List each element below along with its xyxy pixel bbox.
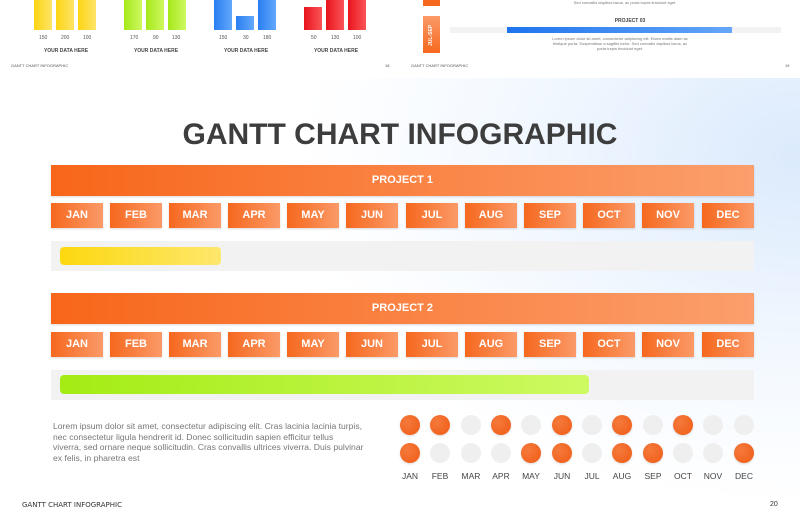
months row 1: OCT: [597, 209, 621, 221]
months row 2: [50, 332, 755, 359]
thumbnail: previous slide project 03: PROJECT 03: [615, 18, 645, 24]
dot chart month labels: JUN: [554, 471, 570, 481]
thumbnail: previous slide bar charts: 170: [130, 35, 138, 41]
text block: nec consectetur ligula hendrerit id. Donec sollicitudin sapien efficitur tellus: [53, 432, 333, 442]
dot chart month labels: SEP: [644, 471, 662, 481]
months row 2: APR: [242, 338, 266, 350]
months row 2: NOV: [656, 338, 680, 350]
months row 2: AUG: [479, 338, 503, 350]
thumbnail: previous slide bar charts: 130: [331, 35, 339, 41]
months row 1: FEB: [125, 209, 147, 221]
panel: project 1: [50, 165, 755, 271]
thumbnail: previous slide bar charts: 150: [219, 35, 227, 41]
title: GANTT CHART INFOGRAPHIC: [182, 118, 617, 151]
panel: project 2: [50, 293, 755, 400]
thumbnail: previous slide bar charts: 130: [172, 35, 180, 41]
months row 1: NOV: [656, 209, 680, 221]
months row 1: APR: [242, 209, 266, 221]
dot matrix chart: [400, 415, 754, 465]
red bars: [304, 7, 322, 30]
green progress bar: [60, 375, 589, 394]
months row 1: [50, 203, 755, 230]
dot chart month labels: AUG: [613, 471, 631, 481]
thumbnail: previous slide bar charts: YOUR DATA HERE: [314, 48, 358, 54]
dot chart month labels: JUL: [584, 471, 600, 481]
months row 2: OCT: [597, 338, 621, 350]
thumbnail: previous slide bar charts: 200: [61, 35, 69, 41]
green bars: [124, 0, 142, 30]
months row 2: SEP: [539, 338, 561, 350]
thumbnail: previous slide bar charts: 100: [353, 35, 361, 41]
thumbnail: previous slide project 03: 19: [785, 63, 789, 68]
project 1 header: [51, 165, 754, 196]
months row 2: JUL: [422, 338, 442, 350]
dot chart month labels: JAN: [402, 471, 418, 481]
thumbnail footer: GANTT CHART INFOGRAPHIC: [11, 63, 68, 68]
timeline track 1: [51, 241, 754, 271]
thumbnail: previous slide bar charts: 180: [263, 35, 271, 41]
thumbnail: previous slide project 03: GANTT CHART INFOGRAPHIC: [411, 63, 468, 68]
months row 2: JAN: [66, 338, 88, 350]
yellow progress bar: [60, 247, 221, 265]
months row 1: JAN: [66, 209, 88, 221]
thumbnail: previous slide bar charts: YOUR DATA HERE: [134, 48, 178, 54]
months row 2: MAR: [182, 338, 208, 350]
thumbnail: previous slide project 03: Lorem ipsum dolor sit amet, consectetur adipiscing elit. Etiam mattis diam ac tristique porta. Suspendisse a sagittis tortor. Sed convallis dapibus lacus, ac porta turpis tincidunt eget.: [552, 36, 688, 51]
dot chart month labels: [402, 471, 753, 481]
months row 1: DEC: [716, 209, 740, 221]
dot chart month labels: MAY: [522, 471, 540, 481]
thumbnail: previous slide bar charts: 50: [311, 35, 317, 41]
months row 1: JUL: [422, 209, 442, 221]
thumbnail: previous slide project 03: [411, 0, 790, 68]
months row 2: JUN: [361, 338, 383, 350]
dot chart month labels: DEC: [735, 471, 753, 481]
thumbnail: previous slide bar charts: 18: [385, 63, 389, 68]
dot chart month labels: MAR: [462, 471, 480, 481]
months row 1: MAY: [301, 209, 325, 221]
page number: 20: [770, 501, 778, 508]
tab JUL-SEP: [423, 16, 440, 53]
text block: [53, 421, 364, 463]
dot chart month labels: FEB: [432, 471, 448, 481]
months row 2: FEB: [125, 338, 147, 350]
thumbnail: previous slide bar charts: [11, 0, 390, 68]
project 1 header: PROJECT 1: [372, 174, 433, 186]
months row 1: SEP: [539, 209, 561, 221]
yellow bars: [34, 0, 52, 30]
timeline track 2: [51, 370, 754, 400]
months row 1: JUN: [361, 209, 383, 221]
months row 2: MAY: [301, 338, 325, 350]
text block: ex felis, in pharetra est: [53, 453, 139, 463]
dot chart month labels: OCT: [674, 471, 692, 481]
project 2 header: [51, 293, 754, 324]
thumbnail: previous slide bar charts: 30: [243, 35, 249, 41]
months row 1: MAR: [182, 209, 208, 221]
thumbnail: previous slide bar charts: YOUR DATA HERE: [224, 48, 268, 54]
tab JUL-SEP: JUL-SEP: [428, 25, 434, 46]
text block: viverra, sed ornare neque sollicitudin. Cras convallis ultrices viverra. Duis pulvinar: [53, 442, 363, 452]
months row 2: DEC: [716, 338, 740, 350]
thumbnail: previous slide bar charts: 90: [153, 35, 159, 41]
footer: GANTT CHART INFOGRAPHIC: [22, 501, 122, 509]
text block: Lorem ipsum dolor sit amet, consectetur adipiscing elit. Cras lacinia lacinia turpis,: [53, 421, 362, 431]
thumbnail: previous slide project 03: Sed convallis dapibus lacus, ac porta turpis tincidunt eget.: [574, 0, 676, 5]
dot chart month labels: APR: [492, 471, 510, 481]
dot chart month labels: NOV: [704, 471, 722, 481]
thumbnail: previous slide bar charts: 100: [83, 35, 91, 41]
blue bars: [214, 0, 232, 30]
thumbnail: previous slide bar charts: YOUR DATA HERE: [44, 48, 88, 54]
project 2 header: PROJECT 2: [372, 302, 433, 314]
months row 1: AUG: [479, 209, 503, 221]
thumbnail: previous slide bar charts: 150: [39, 35, 47, 41]
